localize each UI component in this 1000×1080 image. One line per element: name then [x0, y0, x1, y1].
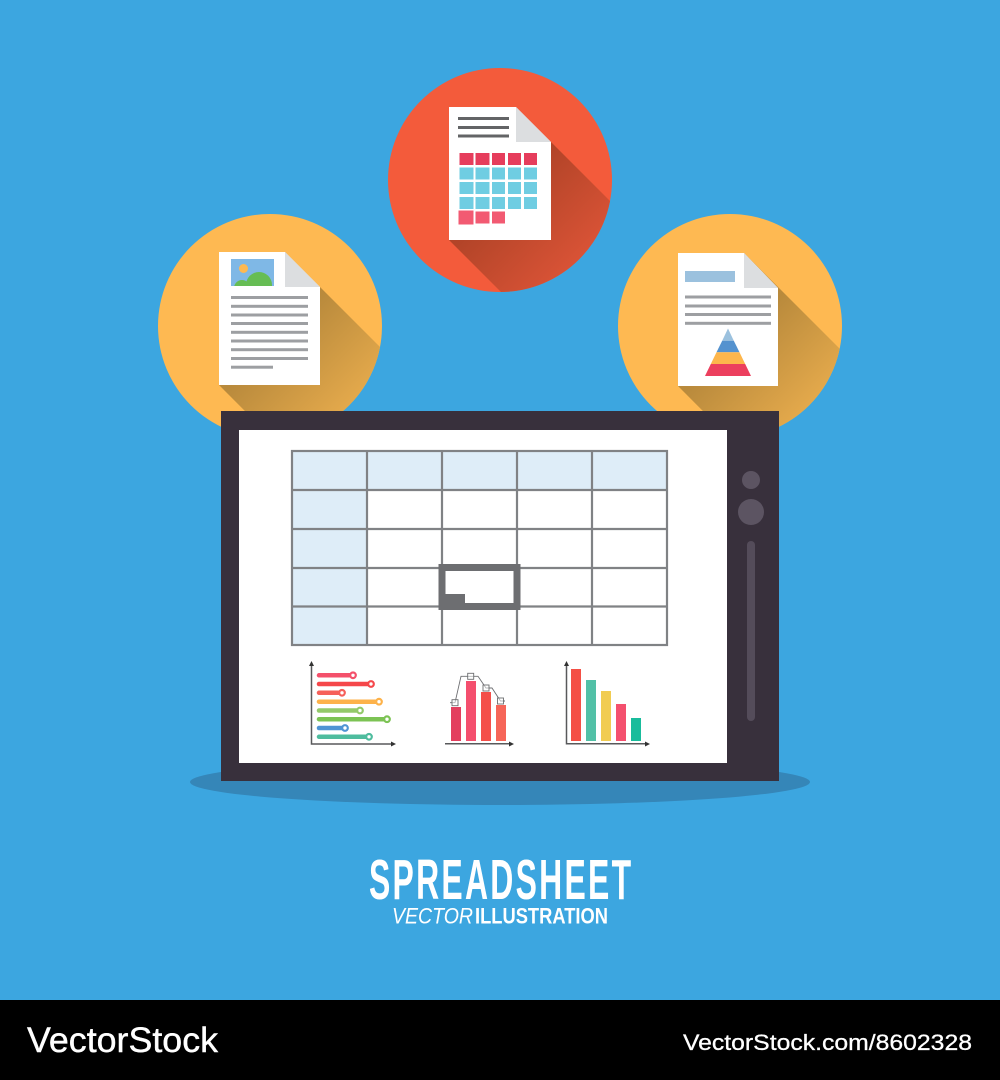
chart: bars with trend line	[445, 673, 514, 746]
small camera button	[742, 471, 760, 489]
large button	[738, 499, 764, 525]
side slider	[747, 541, 755, 721]
tablet shadow	[190, 759, 810, 805]
footer bar	[0, 1000, 1000, 1080]
subtitle: ILLUSTRATION	[475, 904, 608, 928]
footer brand: VectorStock	[27, 1021, 219, 1060]
subtitle: VECTOR	[392, 904, 473, 928]
icon: pyramid chart document in right circle	[618, 214, 842, 427]
chart: descending column bars	[564, 661, 650, 746]
spreadsheet table	[292, 451, 667, 645]
title: SPREADSHEET	[369, 847, 631, 911]
icon: spreadsheet document in red circle	[388, 68, 612, 292]
icon: image and text document in left circle	[158, 214, 382, 427]
footer url: VectorStock.com/8602328	[683, 1030, 972, 1055]
chart: horizontal lollipop bars	[309, 661, 396, 746]
tablet screen	[239, 430, 727, 763]
tablet device	[221, 411, 779, 781]
selected cell	[442, 568, 517, 606]
